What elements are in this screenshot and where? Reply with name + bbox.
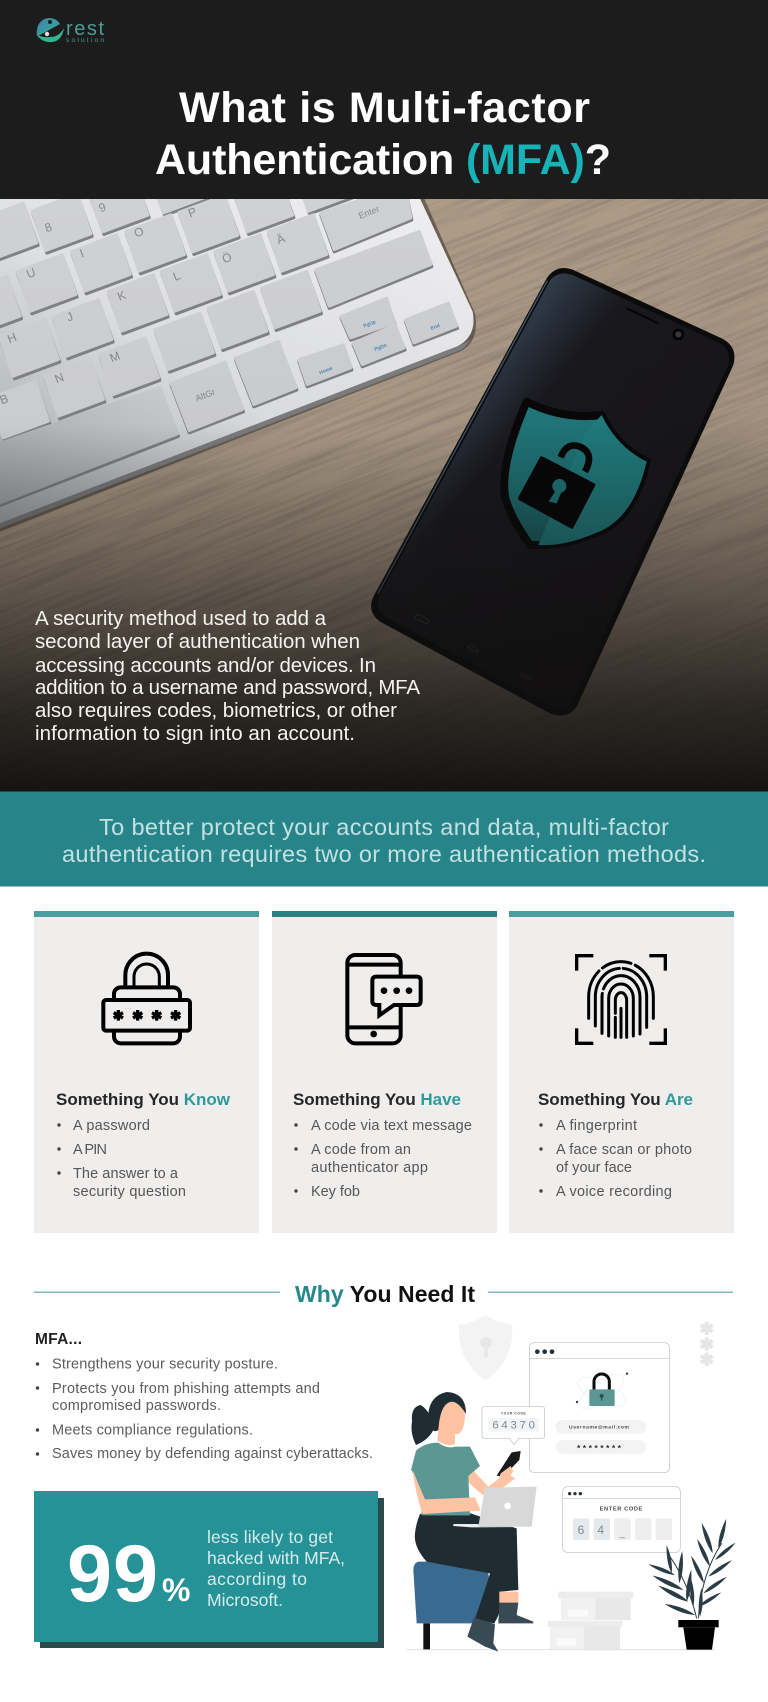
enter code window: _: [618, 1528, 625, 1539]
stat callout: %: [162, 1572, 190, 1608]
woman: [411, 1392, 537, 1652]
storage boxes: [548, 1592, 633, 1649]
laptop: [478, 1487, 537, 1527]
key labels: M: [108, 348, 122, 365]
keyboard: [0, 155, 476, 532]
key labels: H: [5, 330, 18, 346]
key labels: PgDn: [374, 343, 388, 353]
panel: something you are: [509, 911, 734, 1233]
hero photo: [0, 199, 768, 792]
benefits list: compromised passwords.: [52, 1398, 221, 1414]
floor line: [407, 1648, 715, 1651]
list: A fingerprint: [556, 1118, 637, 1134]
heading: Something You Have: [293, 1090, 461, 1109]
login window: ********: [577, 1443, 622, 1453]
shield icon: [504, 402, 647, 545]
key labels: End: [430, 323, 441, 332]
logo: solution: [66, 37, 104, 44]
teal statement band: To better protect your accounts and data, multi-factor: [99, 814, 669, 840]
key labels: Ä: [274, 231, 287, 247]
list: of your face: [556, 1160, 632, 1176]
key labels: 8: [43, 220, 54, 235]
key labels: 9: [97, 200, 108, 215]
plant: [648, 1518, 737, 1650]
list: A voice recording: [556, 1184, 672, 1200]
enter code window: ENTER CODE: [600, 1507, 643, 1513]
stat callout: less likely to get: [207, 1527, 333, 1547]
stat callout: hacked with MFA,: [207, 1548, 345, 1568]
enter code window: 6: [578, 1523, 585, 1537]
ghost shield: [459, 1315, 512, 1381]
list: A password: [73, 1118, 150, 1134]
teal statement band: authentication requires two or more authentication methods.: [62, 841, 706, 867]
logo: rest: [66, 18, 104, 40]
section heading: why you need it: Why You Need It: [295, 1281, 475, 1307]
decorative asterisks: [701, 1322, 713, 1366]
key labels: N: [53, 370, 66, 386]
phone in hand: [497, 1451, 521, 1477]
list: A face scan or photo: [556, 1142, 692, 1158]
trousers: [415, 1513, 518, 1623]
key labels: [0, 200, 441, 407]
list: A PIN: [73, 1142, 107, 1158]
panel: something you have: [272, 911, 497, 1233]
soft buttons: [415, 614, 532, 681]
list: authenticator app: [311, 1160, 428, 1176]
key labels: P: [186, 205, 199, 220]
panel: something you know: [34, 911, 259, 1233]
header band: [0, 0, 768, 199]
title: Authentication (MFA)?: [155, 136, 611, 184]
key labels: J: [64, 309, 75, 324]
dark gradient overlay: [0, 428, 768, 792]
benefits list: MFA...: [35, 1331, 82, 1348]
stat callout: according to: [207, 1569, 307, 1589]
list: The answer to a: [73, 1166, 179, 1182]
key labels: O: [132, 224, 146, 240]
benefits list: Strengthens your security posture.: [52, 1356, 278, 1372]
key labels: PgUp: [363, 319, 377, 330]
large and navigation keys: [0, 185, 457, 505]
heading: Something You Know: [56, 1090, 231, 1109]
stool: [413, 1562, 495, 1649]
benefits list: Protects you from phishing attempts and: [52, 1381, 320, 1397]
login window: [529, 1343, 669, 1473]
login window: Username@mail.com: [569, 1424, 630, 1430]
stat callout: Microsoft.: [207, 1590, 283, 1610]
icon: password lock: [103, 954, 190, 1043]
list: A code from an: [311, 1142, 411, 1158]
hero description text: second layer of authentication when: [35, 630, 360, 653]
logo: [36, 18, 104, 44]
shoes: [498, 1603, 533, 1623]
key labels: U: [24, 265, 37, 281]
key labels: Enter: [357, 204, 381, 221]
icon: phone with message: [347, 955, 421, 1043]
neck and face: [437, 1402, 465, 1445]
wood grain: [0, 199, 768, 662]
key labels: Home: [319, 366, 334, 376]
lower arm: [413, 1470, 481, 1514]
stat callout: 99: [67, 1529, 158, 1619]
icon: fingerprint: [577, 956, 665, 1043]
enter code window: [563, 1487, 680, 1552]
key labels: AltGr: [194, 387, 216, 404]
enter code window: 4: [597, 1523, 604, 1537]
code bubble: 64370: [492, 1420, 535, 1432]
stat callout: [34, 1491, 384, 1648]
phone: [371, 268, 734, 716]
speaker and camera: [627, 308, 684, 340]
code bubble: YOUR CODE: [501, 1412, 526, 1416]
benefits list: [35, 1331, 373, 1462]
teal statement band: [0, 792, 768, 886]
hero description text: A security method used to add a: [35, 607, 327, 630]
list: [539, 1118, 692, 1200]
hero description text: accessing accounts and/or devices. In: [35, 654, 376, 677]
hero description text: addition to a username and password, MFA: [35, 676, 420, 699]
illustration: woman using MFA: [407, 1315, 737, 1652]
title: [155, 84, 611, 184]
list: A code via text message: [311, 1118, 472, 1134]
key labels: L: [171, 268, 183, 284]
heading: Something You Are: [538, 1090, 693, 1109]
key labels: K: [115, 288, 128, 304]
benefits list: Saves money by defending against cyberattacks.: [52, 1446, 373, 1462]
shirt: [411, 1443, 480, 1515]
hero description text: [35, 607, 420, 745]
key labels: Ö: [220, 250, 234, 266]
list: [294, 1118, 472, 1200]
hero description text: also requires codes, biometrics, or other: [35, 699, 397, 722]
hair bun and ponytail: [411, 1405, 433, 1445]
raised arm: [463, 1463, 515, 1498]
list: security question: [73, 1184, 186, 1200]
benefits list: Meets compliance regulations.: [52, 1422, 253, 1438]
ankle: [499, 1592, 518, 1603]
list: Key fob: [311, 1184, 360, 1200]
title: What is Multi-factor: [179, 84, 590, 132]
list: [57, 1118, 186, 1200]
code bubble: [482, 1407, 545, 1445]
open padlock: [520, 445, 593, 527]
key labels: I: [78, 246, 86, 260]
hero description text: information to sign into an account.: [35, 722, 355, 745]
